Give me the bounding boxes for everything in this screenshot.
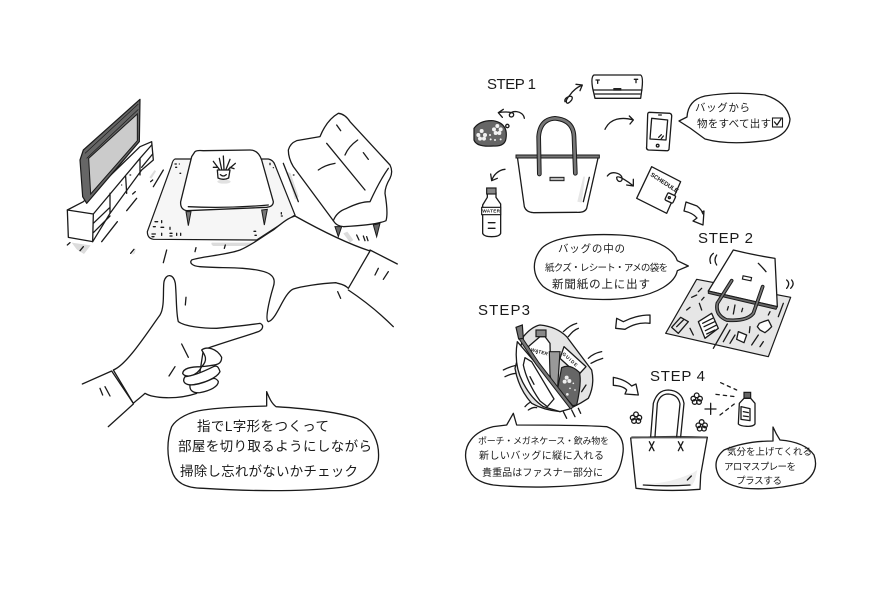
- speech bubble: step 4: 気分を上げてくれる: [727, 446, 812, 458]
- icon: smartphone: [647, 112, 672, 151]
- newspaper: [666, 279, 791, 357]
- speech bubble: room tip: 部屋を切り取るようにしながら: [178, 439, 372, 454]
- panel: step 2 newspaper and bag: [666, 250, 793, 357]
- speech bubble: step 1: バッグから: [695, 101, 750, 114]
- panel: step 3 open pouch: GUIDE: [561, 351, 579, 368]
- rug: [72, 159, 299, 255]
- heading: STEP 1: STEP 1: [487, 76, 536, 93]
- icon: finished tote bag: [631, 390, 707, 490]
- speech bubble: step 3: 貴重品はファスナー部分に: [482, 466, 603, 479]
- icon: checkbox: [772, 118, 782, 127]
- speech bubble: step 1: 物をすべて出す: [697, 117, 771, 130]
- TV stand: [67, 142, 163, 253]
- sofa: [283, 113, 392, 243]
- speech bubble: step 3: 新しいバッグに縦に入れる: [479, 449, 604, 462]
- arrow: step 2 to step 3: [616, 315, 650, 329]
- speech bubble: step 3: ポーチ・メガネケース・飲み物を: [478, 435, 609, 446]
- television: [80, 99, 140, 203]
- speech bubble: step 3: [466, 413, 623, 487]
- icon: tote bag: [516, 118, 599, 213]
- speech bubble: step 4: [716, 427, 816, 489]
- plus sign: [705, 403, 716, 414]
- icon: flowers: [630, 393, 707, 431]
- icon: water bottle: WATER: [482, 209, 501, 214]
- icon: bottle in pouch: WATER: [530, 347, 549, 357]
- arrow: step 3 to step 4: [613, 377, 638, 395]
- speech bubble: step 2: [534, 235, 688, 299]
- icon: schedule book: [637, 167, 681, 213]
- pouch zipper: [516, 325, 572, 412]
- heading: STEP 3: STEP3: [478, 302, 530, 319]
- speech bubble: step 2: 紙クズ・レシート・アメの袋を: [545, 262, 668, 274]
- icon: upturned bag: [708, 250, 793, 320]
- panel: step 1 bag and items: [474, 75, 681, 237]
- icon: purse in pouch: [558, 366, 580, 406]
- speech bubble: room tip: 指でL字形をつくって: [197, 419, 329, 434]
- speech bubble: step 2: 新聞紙の上に出す: [552, 277, 650, 291]
- icon: potted plant: [213, 156, 235, 184]
- speech bubble: step 4: アロマスプレーを: [724, 462, 796, 473]
- heading: STEP 2: STEP 2: [698, 230, 753, 247]
- speech bubble: room tip: [168, 392, 379, 491]
- panel: step 3 open pouch: [503, 323, 603, 418]
- speech bubble: room tip: 掃除し忘れがないかチェック: [180, 463, 358, 479]
- icon: aroma spray bottle: [738, 392, 755, 426]
- speech bubble: step 1: [679, 93, 790, 143]
- hand: left: [82, 276, 263, 427]
- panel: room scene: [67, 99, 397, 327]
- icon: coin purse: [474, 121, 509, 146]
- hand: right: [191, 216, 397, 327]
- icon: water bottle: [482, 188, 501, 237]
- speech bubble: step 4: プラスする: [736, 476, 782, 487]
- arrows around the bag: [491, 84, 633, 186]
- arrow: step 1 to step 2: [684, 202, 704, 225]
- spray mist: [716, 383, 737, 415]
- heading: STEP 4: STEP 4: [650, 368, 705, 385]
- icon: air conditioner: [592, 75, 642, 98]
- panel: step 4 bag and spray: [630, 383, 755, 490]
- icon: schedule book: SCHEDULE: [649, 172, 679, 195]
- speech bubble: step 2: バッグの中の: [558, 242, 625, 255]
- coffee table: [181, 150, 273, 226]
